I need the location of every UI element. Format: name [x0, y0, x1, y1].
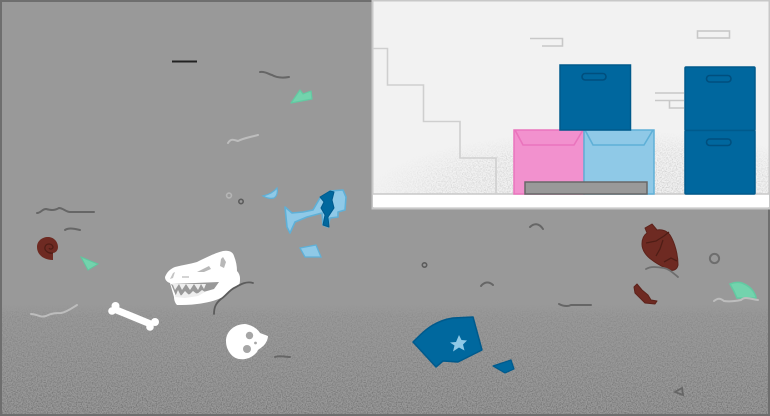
skull openings: [197, 266, 211, 272]
crack over skull: [214, 282, 253, 314]
staircase: [373, 48, 496, 194]
panel: storage room: [372, 0, 770, 208]
small pebbles: [227, 193, 719, 395]
fossils and cracks layer: [31, 62, 758, 395]
fossil: ammonite: [37, 237, 58, 260]
fragment: green top: [291, 90, 312, 103]
upper teeth: [171, 284, 206, 290]
fragment: green small: [81, 257, 98, 270]
box stack: right lower: [685, 130, 755, 194]
fragment: blue small: [493, 360, 514, 373]
fossil: bone: [108, 302, 159, 331]
fragment: blue box with star: [413, 317, 482, 367]
mouth: [171, 282, 219, 296]
fragment: green right: [730, 282, 756, 298]
box: dark blue top: [560, 65, 630, 130]
dash mark: [172, 60, 197, 62]
fragment: light blue tile: [300, 245, 321, 257]
crack under heart: [646, 267, 678, 277]
grey plinth: [525, 182, 647, 194]
fossil: heart fragment: [634, 284, 657, 304]
soil cracks: light: [31, 135, 758, 317]
dark inner piece: [320, 191, 334, 227]
wall bricks: [530, 31, 730, 108]
box: pink: [514, 130, 584, 194]
box stack: right upper: [685, 67, 755, 130]
fossil: dinosaur skull: [165, 251, 240, 305]
fragment: light blue shard: [263, 188, 277, 198]
soil cracks: dark: [37, 72, 591, 357]
fragment: broken light blue vase: [285, 190, 346, 233]
box: light blue: [584, 130, 654, 194]
floor: [373, 194, 769, 207]
fossil: heart: [642, 224, 678, 270]
lower teeth: [175, 290, 205, 298]
fossil: small skull: [226, 324, 268, 359]
star: [450, 335, 467, 352]
